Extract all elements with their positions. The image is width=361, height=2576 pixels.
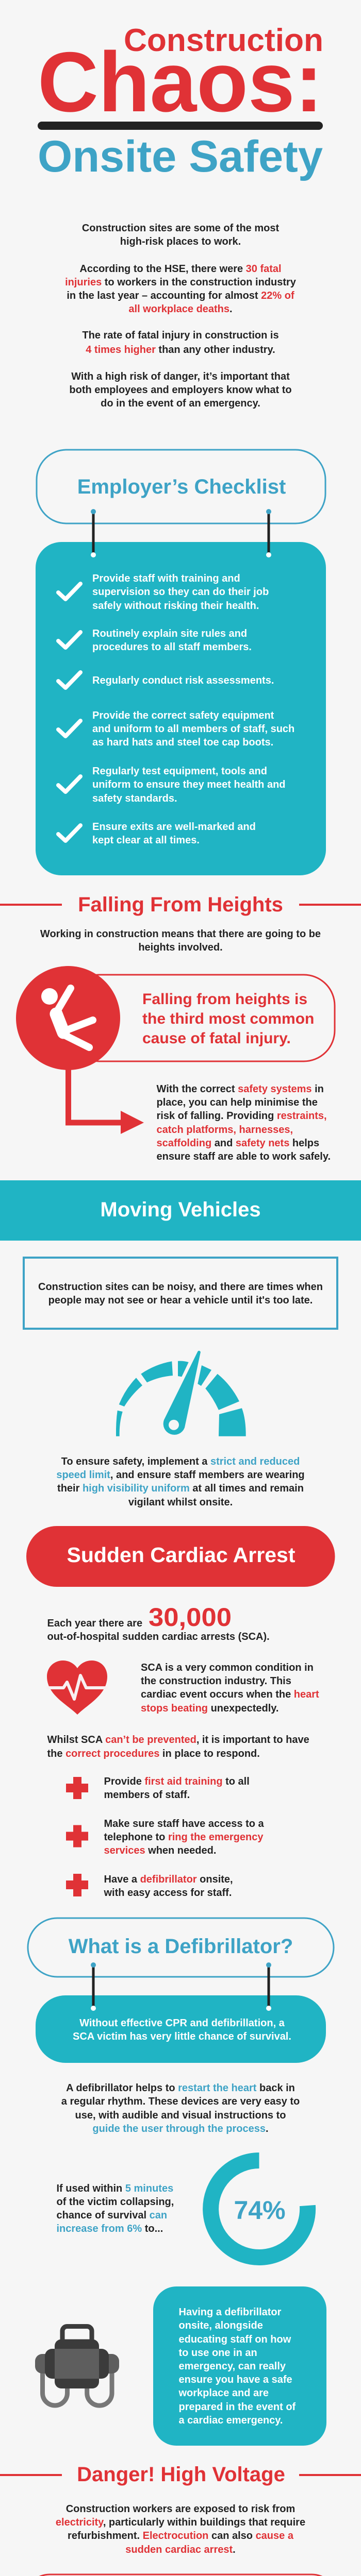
heading band: Moving Vehicles	[100, 1198, 261, 1221]
chart: 74% ring	[211, 2161, 308, 2258]
SCA description: cardiac event occurs when the heart	[141, 1689, 319, 1700]
hanging connectors	[91, 509, 271, 557]
speed limit text: To ensure safety, implement a strict and reduced	[61, 1456, 300, 1467]
list: first aid: members of staff.	[104, 1789, 190, 1801]
icon: heart with pulse	[46, 1660, 108, 1715]
noise warning box: Construction sites can be noisy, and there are times when	[38, 1281, 323, 1293]
intro text: Working in construction means that there are going to be	[40, 928, 321, 940]
survival statistic text: increase from 6% to...	[57, 2223, 163, 2234]
heading: Danger! High Voltage	[77, 2463, 285, 2486]
panel: sudden cardiac arrest	[26, 1526, 335, 1899]
heading pill: What is a Defibrillator?	[69, 1935, 293, 1958]
heading: Falling From Heights	[78, 893, 283, 916]
checklist text: Provide staff with training and	[92, 573, 240, 584]
callout: Falling from heights is	[142, 991, 307, 1008]
survival statistic text: of the victim collapsing,	[57, 2196, 174, 2208]
list: first aid: Provide first aid training to all	[104, 1776, 250, 1787]
list: telephone: services when needed.	[104, 1845, 216, 1856]
SCA description: stops beating unexpectedly.	[141, 1703, 278, 1714]
heading pill	[28, 1918, 334, 1977]
panel: danger high voltage	[0, 2463, 361, 2576]
prevention text	[47, 1734, 309, 1759]
safety systems text: ensure staff are able to work safely.	[157, 1151, 331, 1162]
heading band	[0, 1180, 361, 1241]
statistic: 30,000: out-of-hospital sudden cardiac arrests (SCA).	[47, 1631, 270, 1642]
statistic: 30,000: Each year there are	[47, 1618, 142, 1629]
intro text	[56, 2503, 305, 2555]
intro text: With a high risk of danger, it’s important that	[71, 371, 290, 382]
speed limit text	[56, 1456, 305, 1508]
checklist text: Regularly test equipment, tools and	[92, 766, 267, 777]
checklist text: Ensure exits are well-marked and	[92, 821, 256, 833]
teal info box: onsite, alongside	[178, 2320, 263, 2331]
panel: what is a defibrillator	[28, 1918, 334, 2446]
intro text	[40, 928, 321, 953]
SCA description: SCA is a very common condition in	[141, 1662, 314, 1673]
callout: cause of fatal injury.	[142, 1030, 291, 1047]
survival statistic text: If used within 5 minutes	[57, 2183, 173, 2194]
teal info box: a cardiac emergency.	[178, 2415, 283, 2426]
callout	[24, 2574, 337, 2576]
intro text: 4 times higher than any other industry.	[86, 344, 275, 355]
checklist text: Regularly conduct risk assessments.	[92, 675, 274, 686]
intro text: Construction sites are some of the most	[82, 223, 279, 234]
title	[38, 23, 323, 181]
checklist text: Routinely explain site rules and	[92, 628, 247, 639]
SCA description	[141, 1662, 319, 1714]
checklist text: procedures to all staff members.	[92, 641, 252, 653]
title: Chaos:	[38, 35, 323, 129]
safety systems text: With the correct safety systems in	[157, 1083, 324, 1095]
safety systems text: risk of falling. Providing restraints,	[157, 1110, 327, 1122]
checklist text	[92, 573, 294, 846]
checklist text: safety standards.	[92, 793, 177, 804]
explanation text: a regular rhythm. These devices are very easy to	[61, 2096, 300, 2107]
survival callout	[36, 1995, 326, 2063]
checklist text: supervision so they can do their job	[92, 586, 269, 598]
survival statistic text	[57, 2183, 174, 2234]
checklist text: uniform to ensure they meet health and	[92, 779, 286, 790]
list: telephone	[66, 1818, 265, 1856]
explanation text: guide the user through the process.	[92, 2123, 269, 2134]
checklist text: safely without risking their health.	[92, 600, 259, 612]
explanation text: A defibrillator helps to restart the heart back in	[66, 2082, 295, 2094]
intro text: injuries to workers in the construction industry	[65, 277, 297, 288]
intro text: refurbishment. Electrocution can also cause a	[68, 2530, 294, 2541]
speed limit text: their high visibility uniform at all times and remain	[57, 1483, 304, 1494]
list: defibrillator	[66, 1874, 233, 1899]
chart: 74% ring: 74%	[234, 2196, 286, 2225]
hanging connectors	[91, 1962, 271, 2011]
safety systems text	[157, 1083, 331, 1162]
speed limit text: speed limit, and ensure staff members are wearing	[56, 1469, 305, 1481]
prevention text: Whilst SCA can’t be prevented, it is important to have	[47, 1734, 309, 1745]
explanation text	[61, 2082, 300, 2134]
intro text: The rate of fatal injury in construction is	[82, 330, 279, 341]
icon: speedometer	[116, 1351, 246, 1436]
intro text: high-risk places to work.	[120, 236, 241, 247]
checklist text: Provide the correct safety equipment	[92, 710, 274, 721]
statistic: 30,000: 30,000	[149, 1603, 232, 1632]
survival callout: SCA victim has very little chance of survival.	[73, 2031, 291, 2042]
intro text: sudden cardiac arrest.	[125, 2544, 236, 2555]
survival callout: Without effective CPR and defibrillation, a	[79, 2018, 285, 2029]
check icons	[58, 584, 80, 841]
checklist heading pill: Employer’s Checklist	[77, 476, 286, 498]
intro text: all workplace deaths.	[128, 303, 233, 315]
intro text: electricity, particularly within buildings that require	[56, 2517, 305, 2528]
noise warning box	[24, 1258, 337, 1329]
prevention text: the correct procedures in place to respond.	[47, 1748, 260, 1759]
safety systems text: place, you can help minimise the	[157, 1097, 318, 1108]
heading pill: Sudden Cardiac Arrest	[67, 1543, 296, 1567]
intro text: do in the event of an emergency.	[101, 398, 260, 409]
intro text	[65, 223, 297, 409]
list: defibrillator: Have a defibrillator onsite,	[104, 1874, 233, 1885]
checklist text: as hard hats and steel toe cap boots.	[92, 737, 273, 748]
intro text: in the last year – accounting for almost 22% of	[67, 290, 294, 301]
panel: moving vehicles	[0, 1180, 361, 1508]
intro text: Construction workers are exposed to risk from	[66, 2503, 295, 2515]
intro text: heights involved.	[138, 942, 223, 953]
intro text: both employees and employers know what to	[69, 384, 292, 396]
noise warning box: people may not see or hear a vehicle until it's too late.	[48, 1295, 313, 1306]
teal info box: to use one in an	[178, 2347, 257, 2359]
teal info box: Having a defibrillator	[178, 2307, 282, 2318]
icon: falling person	[16, 966, 120, 1070]
intro text: According to the HSE, there were 30 fatal	[79, 263, 282, 275]
icon: defibrillator	[35, 2327, 119, 2405]
checklist text: kept clear at all times.	[92, 835, 200, 846]
speed limit text: vigilant whilst onsite.	[128, 1497, 233, 1508]
list: telephone: telephone to ring the emergency	[104, 1832, 264, 1843]
panel: employer's checklist	[36, 450, 326, 875]
survival statistic text: chance of survival can	[57, 2210, 167, 2221]
teal info box	[153, 2286, 326, 2446]
callout	[68, 975, 335, 1061]
list: first aid	[66, 1776, 250, 1801]
safety systems text: catch platforms, harnesses,	[157, 1124, 293, 1136]
teal info box: workplace and are	[178, 2387, 269, 2399]
arrow	[68, 1061, 144, 1134]
safety systems text: scaffolding and safety nets helps	[157, 1138, 319, 1149]
list: telephone: Make sure staff have access to a	[104, 1818, 265, 1829]
heading pill	[26, 1526, 335, 1587]
teal info box: emergency, can really	[178, 2361, 286, 2372]
panel: falling from heights	[0, 893, 361, 1162]
title: Onsite Safety	[38, 132, 323, 181]
teal info box: ensure you have a safe	[178, 2374, 292, 2385]
statistic: 30,000	[47, 1603, 270, 1642]
callout: the third most common	[142, 1010, 314, 1027]
checklist heading pill	[37, 450, 325, 523]
explanation text: use, with audible and visual instructions to	[75, 2110, 286, 2121]
teal info box: educating staff on how	[178, 2334, 291, 2345]
SCA description: the construction industry. This	[141, 1675, 291, 1687]
title: Construction	[124, 23, 323, 58]
checklist panel background	[36, 542, 326, 875]
list: defibrillator: with easy access for staff.	[103, 1887, 232, 1899]
teal info box: prepared in the event of	[178, 2401, 296, 2413]
checklist text: and uniform to all members of staff, such	[92, 723, 294, 735]
